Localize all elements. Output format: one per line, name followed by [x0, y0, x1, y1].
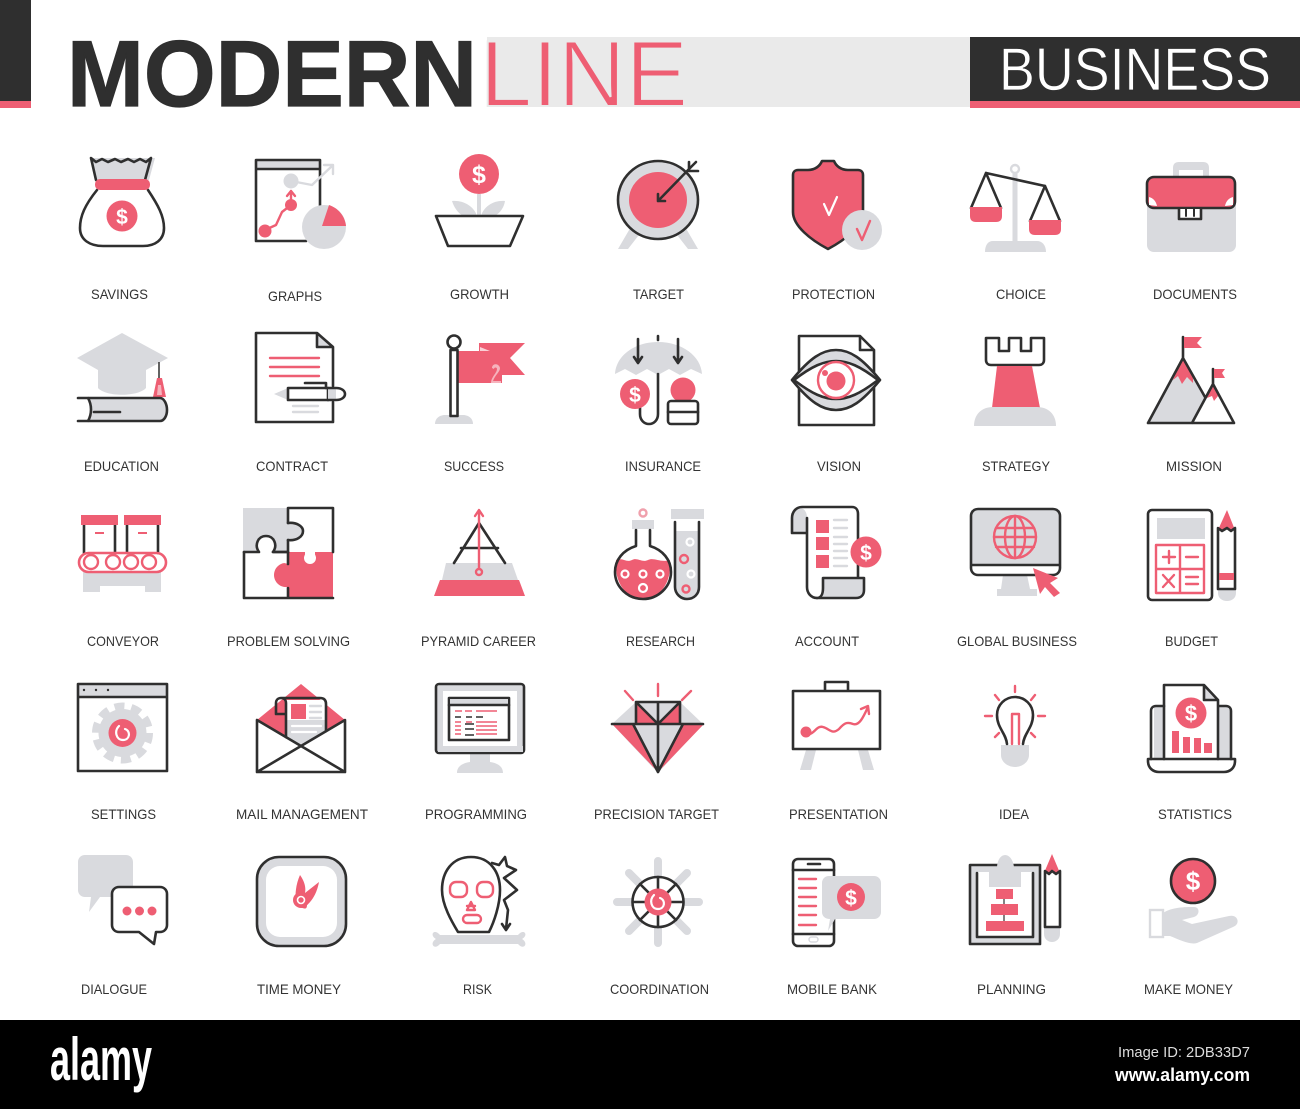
label: time money: TIME MONEY: [257, 981, 342, 997]
label: mission: MISSION: [1166, 458, 1222, 474]
icon: mobile bank: [793, 859, 881, 946]
icon: pyramid career: [434, 510, 525, 596]
icon: idea: [985, 686, 1045, 767]
label: risk: RISK: [463, 981, 493, 997]
icon: mobile bank: $: [845, 887, 857, 910]
icon: account: [792, 507, 882, 598]
icon: budget: [1148, 510, 1236, 601]
footer bar: [0, 1020, 1300, 1109]
icon: growth: [436, 154, 523, 246]
icon: success: [435, 336, 525, 424]
label: insurance: INSURANCE: [625, 458, 701, 474]
label: budget: BUDGET: [1165, 633, 1218, 649]
icon: coordination: [617, 861, 699, 943]
label: research: RESEARCH: [626, 633, 695, 649]
icon: graphs: [256, 160, 346, 249]
label: mobile bank: MOBILE BANK: [787, 981, 878, 997]
icon: make money: [1150, 859, 1238, 943]
label: graphs: GRAPHS: [268, 288, 322, 304]
footer logo: alamy: alamy: [50, 1026, 152, 1093]
icon: research: [615, 509, 704, 599]
label: documents: DOCUMENTS: [1153, 286, 1237, 302]
icon: problem solving: [243, 508, 333, 598]
icon: education: [77, 333, 168, 421]
icon: statistics: [1148, 685, 1235, 772]
label: problem solving: PROBLEM SOLVING: [227, 633, 350, 649]
label: savings: SAVINGS: [91, 286, 148, 302]
icon: insurance: [615, 336, 702, 424]
label: mail management: MAIL MANAGEMENT: [236, 806, 368, 822]
label: success: SUCCESS: [444, 458, 504, 474]
label: settings: SETTINGS: [91, 806, 156, 822]
icon: planning: [970, 854, 1060, 944]
title: MODERN: MODERN: [67, 21, 477, 126]
label: make money: MAKE MONEY: [1144, 981, 1234, 997]
icon: dialogue: [78, 855, 167, 944]
icon: precision target: [612, 684, 703, 773]
icon: strategy: [974, 338, 1056, 426]
icon: mission: [1148, 337, 1234, 423]
footer image id: Image ID: 2DB33D7: [1118, 1044, 1250, 1061]
icon: time money: [257, 857, 346, 946]
icon: risk: [433, 857, 525, 947]
header bar: [0, 0, 1300, 126]
icon: insurance: $: [629, 384, 641, 407]
icon: savings: $: [116, 206, 128, 229]
icon: savings: [80, 158, 164, 246]
label: choice: CHOICE: [996, 286, 1046, 302]
label: coordination: COORDINATION: [610, 981, 709, 997]
left accent block: [0, 0, 31, 108]
icon: documents: [1147, 162, 1236, 252]
icon: programming: [436, 684, 524, 773]
footer website: www.alamy.com: [1114, 1065, 1250, 1085]
icon: growth: $: [472, 161, 486, 189]
label: idea: IDEA: [999, 806, 1030, 822]
label: conveyor: CONVEYOR: [87, 633, 159, 649]
label: presentation: PRESENTATION: [789, 806, 888, 822]
label: global business: GLOBAL BUSINESS: [957, 633, 1077, 649]
icon: vision: [792, 336, 880, 425]
icon: target: [618, 161, 698, 249]
icon: global business: [971, 509, 1060, 597]
business badge: BUSINESS: [999, 36, 1271, 103]
icon: make money: $: [1186, 866, 1201, 896]
label: statistics: STATISTICS: [1158, 806, 1232, 822]
icon: settings: [78, 684, 167, 771]
label: account: ACCOUNT: [795, 633, 859, 649]
label: education: EDUCATION: [84, 458, 159, 474]
icon: conveyor: [79, 515, 166, 592]
label: target: TARGET: [633, 286, 684, 302]
icon: contract: [256, 333, 345, 422]
icon: account: $: [860, 542, 872, 565]
label: pyramid career: PYRAMID CAREER: [421, 633, 536, 649]
label: contract: CONTRACT: [256, 458, 328, 474]
label: growth: GROWTH: [450, 286, 509, 302]
label: programming: PROGRAMMING: [425, 806, 527, 822]
icon: choice: [970, 165, 1061, 252]
label: strategy: STRATEGY: [982, 458, 1051, 474]
icon: statistics: $: [1185, 701, 1197, 726]
icon: protection: [793, 161, 882, 250]
label: dialogue: DIALOGUE: [81, 981, 147, 997]
grey title band: [487, 37, 970, 107]
icon: presentation: [793, 682, 880, 770]
label: precision target: PRECISION TARGET: [594, 806, 719, 822]
title: LINE: LINE: [480, 21, 688, 126]
label: protection: PROTECTION: [792, 286, 875, 302]
icon: mail management: [257, 684, 345, 772]
label: planning: PLANNING: [977, 981, 1046, 997]
label: vision: VISION: [817, 458, 861, 474]
